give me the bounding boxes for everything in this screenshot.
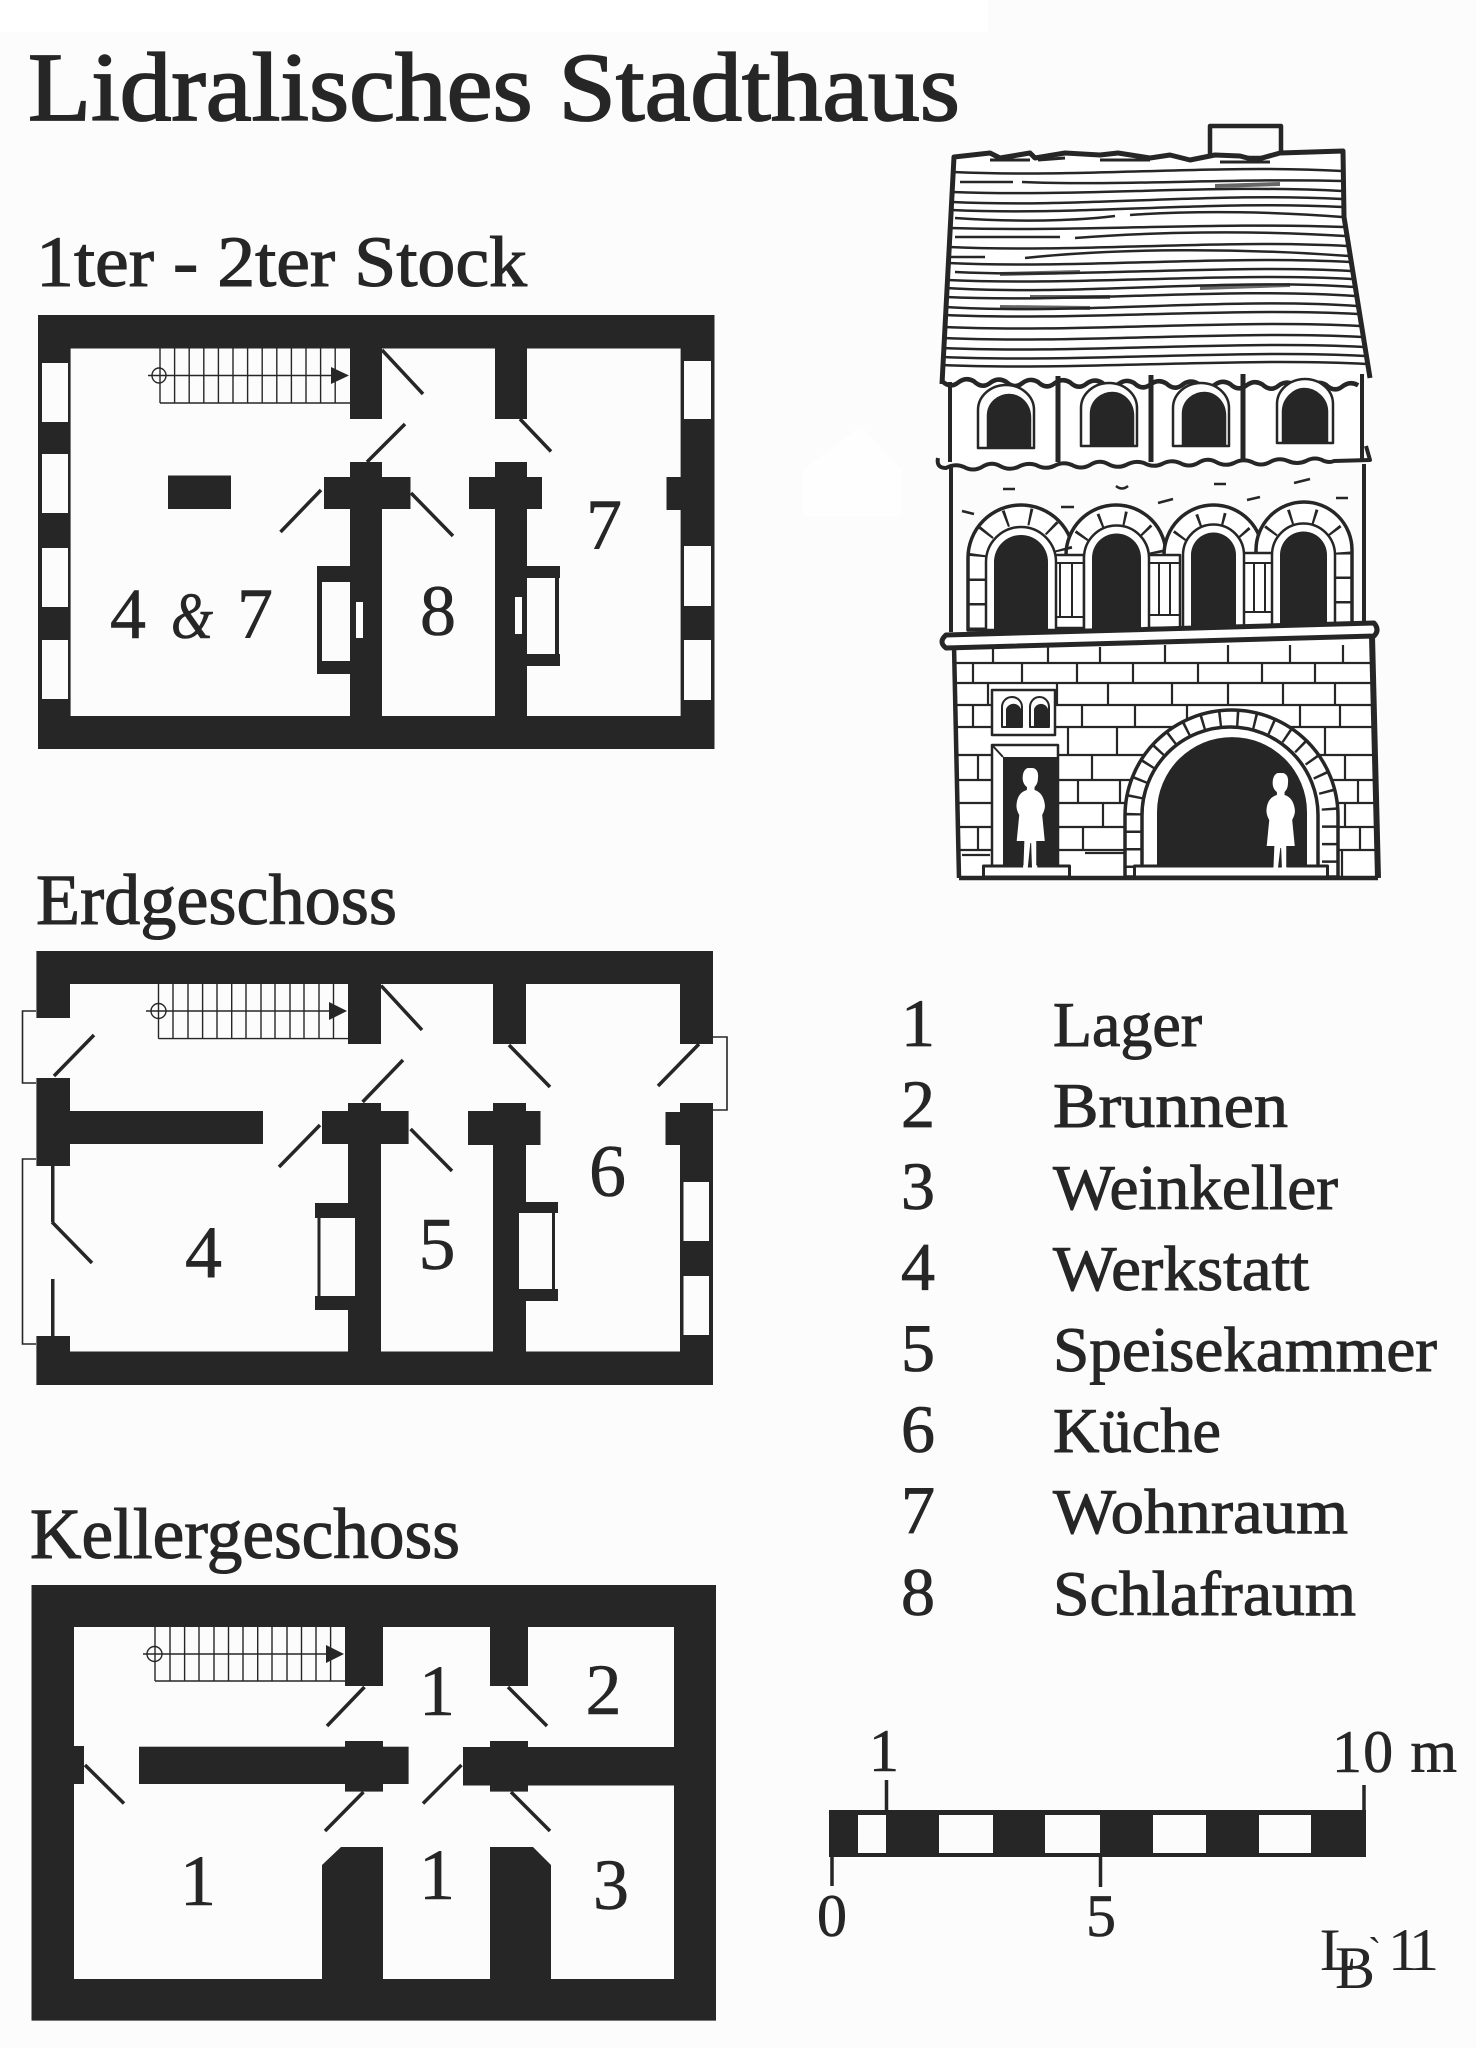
staircase <box>148 348 350 403</box>
legend names: Küche <box>1053 1395 1221 1466</box>
room labels: 1 <box>419 1835 455 1915</box>
room labels: 7 <box>237 574 273 654</box>
legend numbers: 5 <box>901 1310 935 1386</box>
legend names <box>1053 989 1437 1629</box>
walls <box>32 1585 716 2021</box>
door with figure <box>984 745 1070 877</box>
legend numbers: 7 <box>901 1472 935 1548</box>
arcade <box>968 502 1352 630</box>
scale bar <box>817 1718 1457 1949</box>
legend names: Werkstatt <box>1053 1233 1309 1304</box>
string course <box>942 623 1377 648</box>
heading: upper floors: 1ter - 2ter Stock <box>36 222 527 302</box>
windows <box>320 1182 709 1335</box>
staircase <box>146 984 348 1039</box>
legend numbers: 2 <box>901 1066 935 1142</box>
room labels <box>180 1650 629 1925</box>
panel: cellar plan <box>32 1585 716 2021</box>
walls <box>36 951 713 1385</box>
windows <box>978 379 1333 448</box>
room labels <box>110 485 622 654</box>
room labels: 3 <box>593 1845 629 1925</box>
heading: ground floor: Erdgeschoss <box>36 860 397 940</box>
legend numbers: 3 <box>901 1148 935 1224</box>
scale bar: 5 <box>1086 1883 1116 1949</box>
room labels: 7 <box>586 485 622 565</box>
room labels: 6 <box>589 1131 626 1213</box>
illustration: town house facade <box>938 126 1378 878</box>
entrance steps <box>22 1011 727 1344</box>
signature: B <box>1335 1935 1375 2001</box>
gate arch with figure <box>1125 710 1338 877</box>
staircase <box>143 1627 345 1681</box>
doors <box>280 350 551 536</box>
legend <box>901 985 1437 1630</box>
legend names: Speisekammer <box>1053 1314 1437 1385</box>
legend numbers: 6 <box>901 1391 935 1467</box>
legend names: Wohnraum <box>1053 1476 1348 1547</box>
legend names: Weinkeller <box>1053 1152 1338 1223</box>
room labels: & <box>171 580 214 653</box>
columns <box>1049 553 1277 628</box>
room labels: 1 <box>180 1841 216 1921</box>
room labels <box>185 1131 626 1294</box>
room labels: 2 <box>586 1650 622 1730</box>
roof <box>942 151 1370 384</box>
legend names: Brunnen <box>1053 1070 1288 1141</box>
small twin window <box>992 690 1055 735</box>
scale bar: 0 <box>817 1883 847 1949</box>
scale bar: 1 <box>869 1718 899 1784</box>
legend numbers: 4 <box>901 1229 935 1305</box>
signature <box>1320 1917 1439 2001</box>
doors <box>52 986 699 1263</box>
signature: L <box>1320 1917 1357 1983</box>
legend numbers: 1 <box>901 985 935 1061</box>
stone arches <box>968 505 1074 630</box>
lower wall masonry <box>954 636 1378 878</box>
upper storey with windows <box>942 371 1362 462</box>
room labels: 8 <box>420 571 456 651</box>
chimney <box>1210 126 1281 158</box>
windows <box>42 361 711 700</box>
room labels: 4 <box>110 574 146 654</box>
legend names: Schlafraum <box>1053 1558 1356 1629</box>
middle wall <box>938 446 1370 632</box>
legend names: Lager <box>1053 989 1202 1060</box>
panel: upper floor plan <box>38 315 714 749</box>
signature: 11 <box>1388 1917 1439 1983</box>
heading: cellar: Kellergeschoss <box>30 1494 460 1574</box>
room labels: 4 <box>185 1212 222 1294</box>
panel: ground floor plan <box>22 951 727 1385</box>
room labels: 1 <box>419 1651 455 1731</box>
room labels: 5 <box>418 1204 456 1286</box>
legend numbers: 8 <box>901 1554 935 1630</box>
title: Lidralisches Stadthaus <box>28 34 960 142</box>
doors <box>85 1687 550 1831</box>
signature: ` <box>1368 1929 1381 1974</box>
legend numbers <box>901 985 935 1630</box>
arch openings <box>986 527 1056 630</box>
scale bar: 10 m <box>1332 1719 1457 1785</box>
walls <box>38 315 714 749</box>
